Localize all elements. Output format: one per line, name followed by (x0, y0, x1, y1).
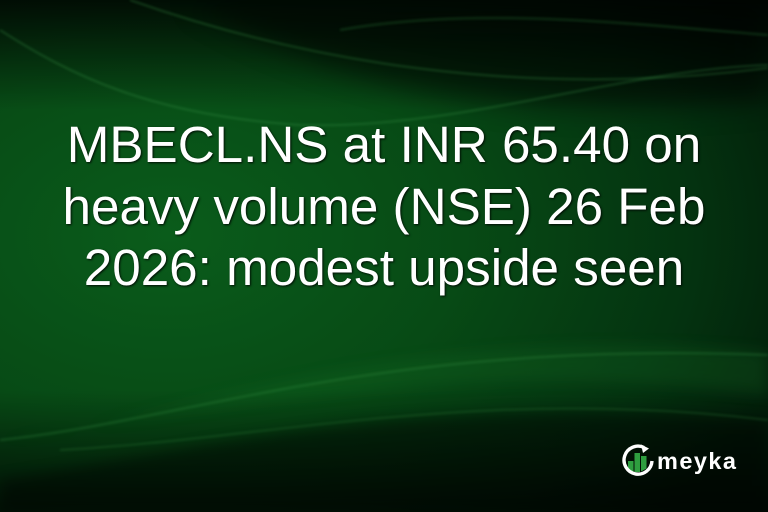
logo: meyka (622, 444, 737, 476)
logo wordmark: meyka (657, 448, 737, 474)
title: heavy volume (NSE) 26 Feb (63, 178, 705, 234)
icon: chart in circle (624, 444, 652, 474)
title: 2026: modest upside seen (84, 239, 684, 296)
title: MBECL.NS at INR 65.40 on (67, 116, 701, 173)
title (63, 116, 706, 298)
